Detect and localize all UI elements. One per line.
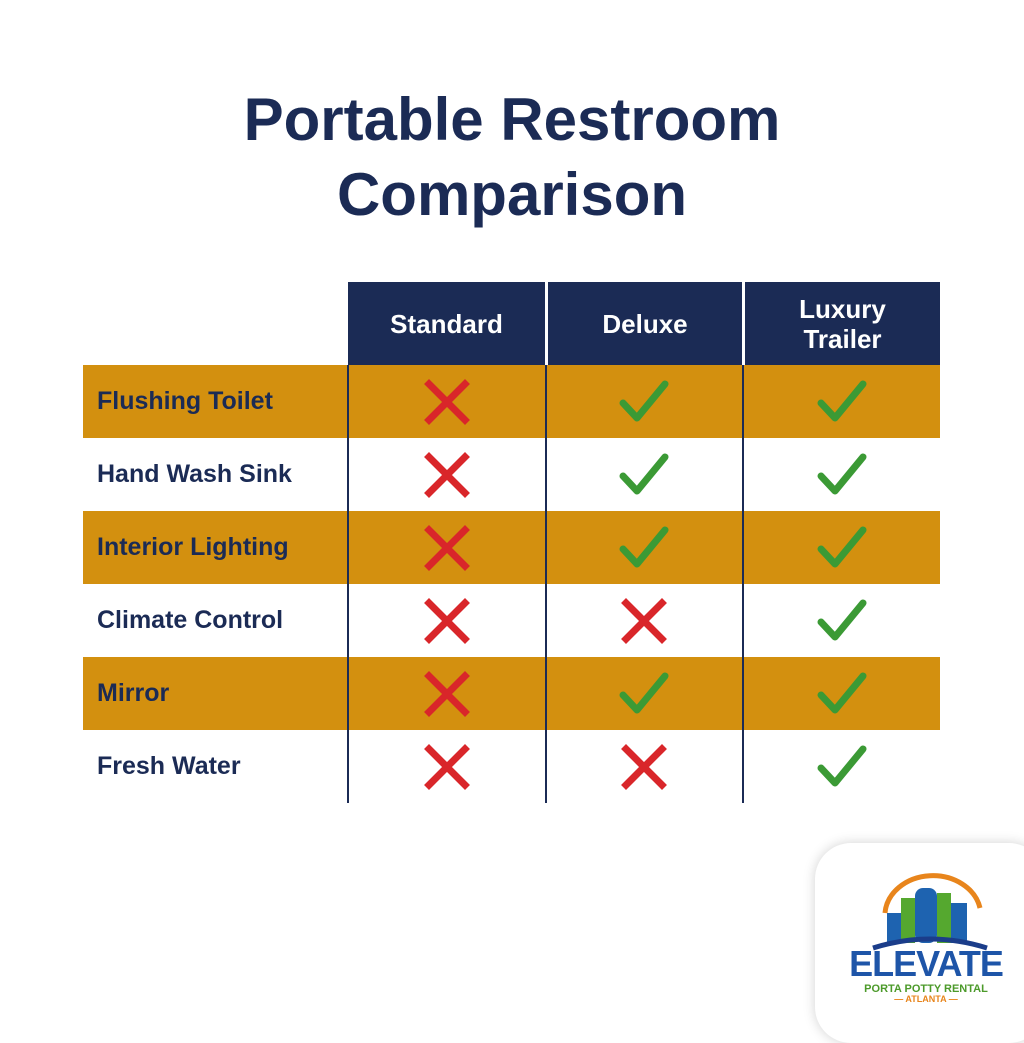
title <box>244 86 780 228</box>
row band: mirror <box>83 657 940 730</box>
header: Luxury Trailer <box>745 282 940 365</box>
header: Standard: Standard <box>390 308 503 338</box>
header: Standard <box>348 282 545 365</box>
logo text: ELEVATE <box>849 943 1003 984</box>
label: Interior Lighting: Interior Lighting <box>97 533 289 561</box>
label: Mirror: Mirror <box>97 679 169 707</box>
marks row 2 <box>429 457 863 493</box>
icon: logo building <box>872 873 988 950</box>
marks row 6 <box>429 749 863 785</box>
label: Fresh Water: Fresh Water <box>97 752 241 780</box>
title: Comparison <box>337 161 687 228</box>
marks row 3 <box>429 530 863 566</box>
logo text: — ATLANTA — <box>894 994 958 1004</box>
logo text: PORTA POTTY RENTAL <box>864 983 988 995</box>
logo text <box>849 943 1003 1004</box>
header: Luxury Trailer: Trailer <box>803 324 882 354</box>
marks row 1 <box>429 384 863 420</box>
label: Climate Control: Climate Control <box>97 606 283 634</box>
header: Luxury Trailer: Luxury <box>799 294 886 324</box>
row band: flushing toilet <box>83 365 940 438</box>
label: Flushing Toilet: Flushing Toilet <box>97 387 273 415</box>
marks row 4 <box>429 603 863 639</box>
marks row 5 <box>429 676 863 712</box>
header: Deluxe <box>548 282 742 365</box>
logo card <box>815 843 1024 1043</box>
title: Portable Restroom <box>244 86 780 153</box>
label: Hand Wash Sink: Hand Wash Sink <box>97 460 292 488</box>
header: Deluxe: Deluxe <box>602 308 688 338</box>
row band: interior lighting <box>83 511 940 584</box>
